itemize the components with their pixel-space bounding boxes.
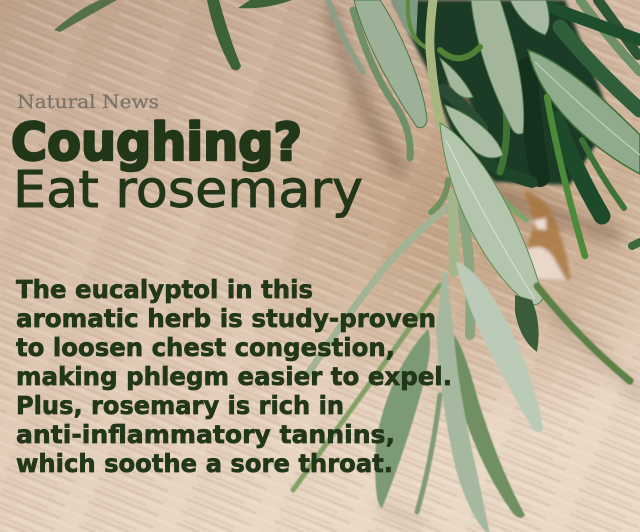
- rosemary sprig: main pale leaf and side shoots: [308, 123, 543, 374]
- leaf shadows on wood: [330, 10, 640, 525]
- body text: aromatic herb is study-proven: [16, 304, 436, 333]
- oil stain on board: [524, 190, 570, 280]
- body text: Plus, rosemary is rich in: [16, 391, 344, 420]
- body text: making phlegm easier to expel.: [16, 362, 452, 391]
- source label: Natural News: Natural News: [17, 91, 159, 113]
- title: Eat rosemary: [13, 161, 363, 220]
- body text: to loosen chest congestion,: [16, 333, 395, 362]
- body text: [16, 275, 452, 478]
- title: [11, 113, 363, 220]
- rosemary sprig: upper pale leaves: [328, 0, 640, 256]
- body text: anti-inflammatory tannins,: [16, 420, 395, 449]
- rosemary sprig: dark back leaves: [392, 0, 640, 246]
- body text: which soothe a sore throat.: [16, 449, 393, 478]
- title: Coughing?: [11, 113, 302, 173]
- rosemary sprig: lower blurred leaves: [293, 262, 630, 530]
- icon: rosemary sprigs top left: [54, 0, 292, 70]
- body text: The eucalyptol in this: [16, 275, 313, 304]
